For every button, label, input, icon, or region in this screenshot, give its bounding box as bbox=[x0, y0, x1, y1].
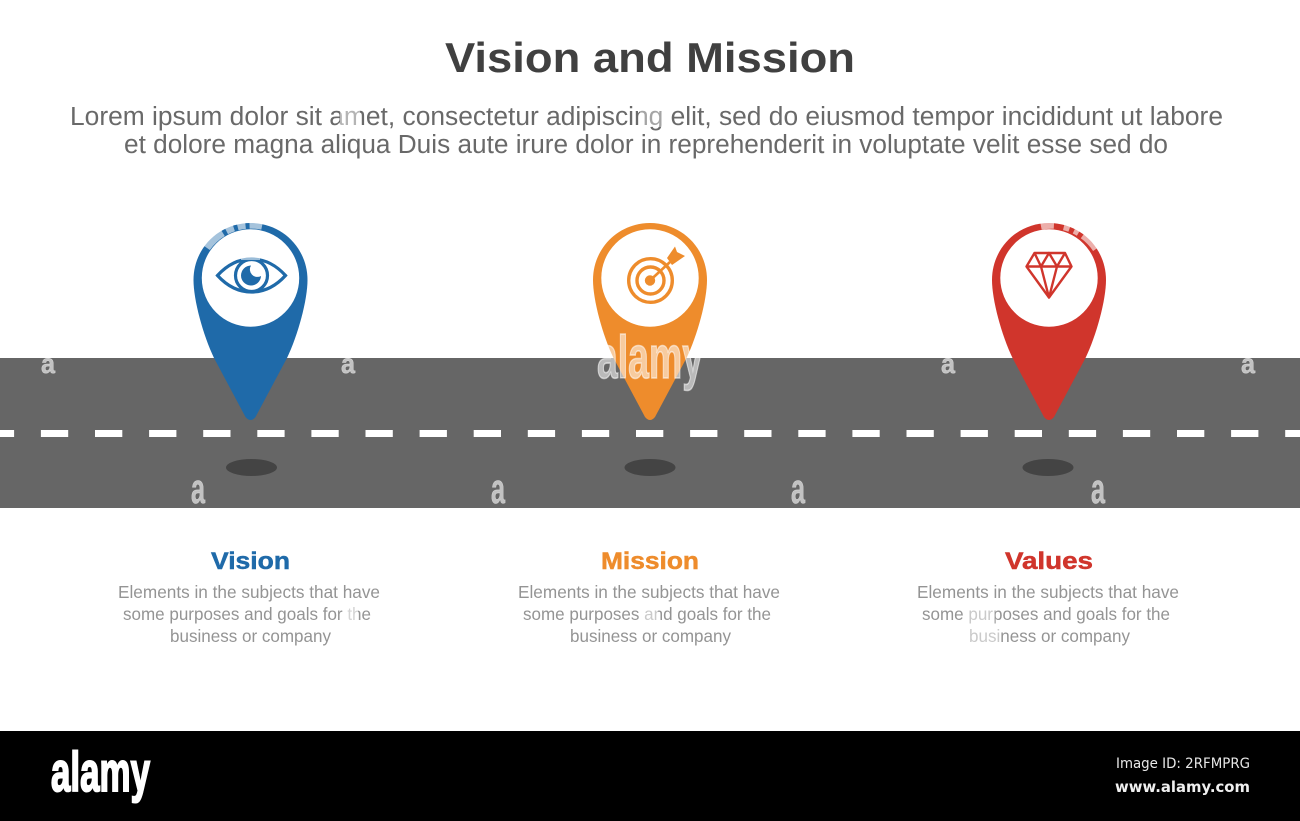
text block: mission: Mission bbox=[601, 548, 699, 575]
text block: values: Elements in the subjects that have bbox=[917, 582, 1179, 602]
intro paragraph bbox=[70, 103, 1223, 159]
icon: eye bbox=[218, 258, 286, 292]
icon: target with arrow bbox=[629, 246, 685, 302]
watermark: small marks on road: a bbox=[191, 465, 205, 512]
watermark: small marks on road: a bbox=[341, 348, 355, 379]
map pin: values bbox=[992, 223, 1106, 420]
text block: values bbox=[917, 548, 1179, 646]
text block: mission bbox=[518, 548, 780, 646]
watermark: small marks on road: a bbox=[1241, 348, 1255, 379]
pin shadow: vision bbox=[226, 459, 277, 476]
text block: mission: Elements in the subjects that have bbox=[518, 582, 780, 602]
text block: vision: business or company bbox=[170, 626, 331, 646]
watermark: small marks on road: a bbox=[1091, 465, 1105, 512]
text block: values: some purposes and goals for the bbox=[922, 604, 1170, 624]
watermark: central logo: alamy bbox=[597, 324, 703, 391]
intro paragraph: et dolore magna aliqua Duis aute irure dolor in reprehenderit in voluptate velit esse sed do bbox=[124, 131, 1168, 159]
watermark: small marks on road: a bbox=[41, 348, 55, 379]
road bbox=[0, 358, 1300, 508]
footer bar bbox=[0, 731, 1300, 821]
title: Vision and Mission bbox=[445, 34, 855, 81]
text block: vision: Elements in the subjects that have bbox=[118, 582, 380, 602]
text block: mission: some purposes and goals for the bbox=[523, 604, 771, 624]
footer url: www.alamy.com bbox=[1115, 778, 1250, 796]
icon: diamond bbox=[1026, 253, 1072, 298]
footer image id: Image ID: 2RFMPRG bbox=[1116, 756, 1250, 772]
text block: values: business or company bbox=[969, 626, 1130, 646]
watermark: small marks on road: a bbox=[791, 465, 805, 512]
intro paragraph: Lorem ipsum dolor sit amet, consectetur adipiscing elit, sed do eiusmod tempor incididunt ut labore bbox=[70, 103, 1223, 131]
text block: vision: Vision bbox=[211, 548, 290, 575]
text block: mission: business or company bbox=[570, 626, 731, 646]
pin shadow: values bbox=[1022, 459, 1074, 476]
footer logo: alamy bbox=[51, 740, 150, 803]
watermark: small marks on road bbox=[41, 348, 1255, 512]
watermark: small marks on road: a bbox=[941, 348, 955, 379]
pin shadow: mission bbox=[624, 459, 676, 476]
text block: vision bbox=[118, 548, 380, 646]
text block: values: Values bbox=[1005, 548, 1093, 575]
watermark: small marks on road: a bbox=[491, 465, 505, 512]
text block: vision: some purposes and goals for the bbox=[123, 604, 371, 624]
map pin: mission bbox=[593, 223, 707, 420]
map pin: vision bbox=[194, 223, 308, 420]
